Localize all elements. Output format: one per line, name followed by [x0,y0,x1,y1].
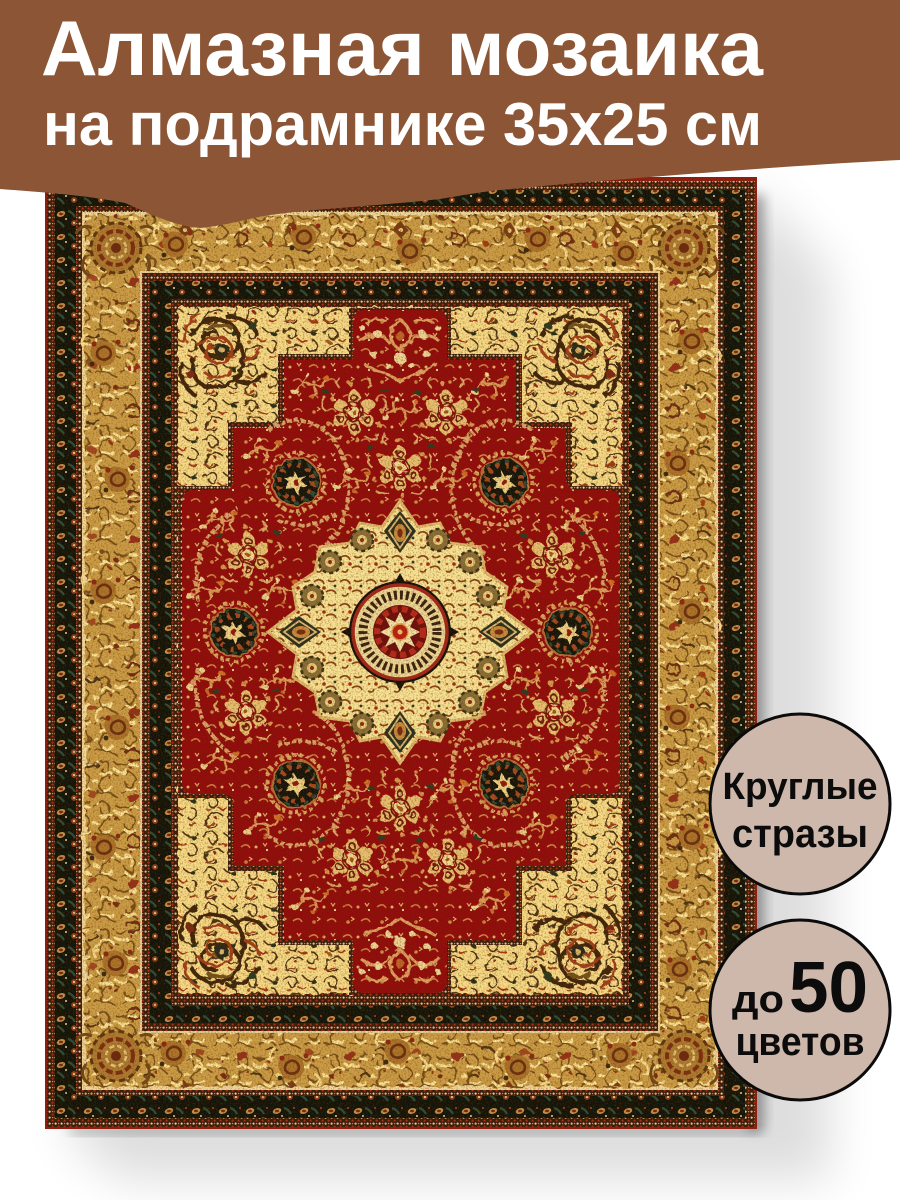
red field ornaments [186,319,616,981]
inner dark border [140,271,660,1033]
gold floral border [76,212,724,1090]
subtitle: на подрамнике 35х25 см [43,91,762,158]
top and bottom tab ornaments [359,319,441,981]
badge: up to 50 colours [710,920,890,1100]
stepped trim [178,308,624,995]
star body [268,501,532,763]
central star medallion [268,501,532,763]
cream corner ornaments [181,314,619,988]
canvas drop shadow [62,190,830,1180]
badge: round rhinestones: Круглые [722,766,878,808]
badge: round rhinestones: стразы [732,812,868,856]
badge: up to 50 colours: цветов [736,1020,864,1064]
badge: up to 50 colours: до [732,979,784,1021]
carpet artwork [45,177,757,1129]
outer dark border [47,181,755,1127]
center circle [341,573,459,691]
sprigs [186,373,616,914]
cream corner field [178,307,622,994]
carpet edge [45,177,757,1129]
banner shape [0,0,900,228]
scrolling vines [196,421,604,845]
title: Алмазная мозаика [41,4,764,92]
banner [0,0,900,228]
floral clusters [213,378,588,890]
woven speckle texture [46,178,756,1128]
red stepped field [182,310,620,993]
badge: round rhinestones [710,714,890,894]
gold border ornaments [76,218,724,1087]
star ornaments [279,511,521,753]
dark rosettes [205,453,597,813]
badge: up to 50 colours: 50 [789,948,868,1028]
